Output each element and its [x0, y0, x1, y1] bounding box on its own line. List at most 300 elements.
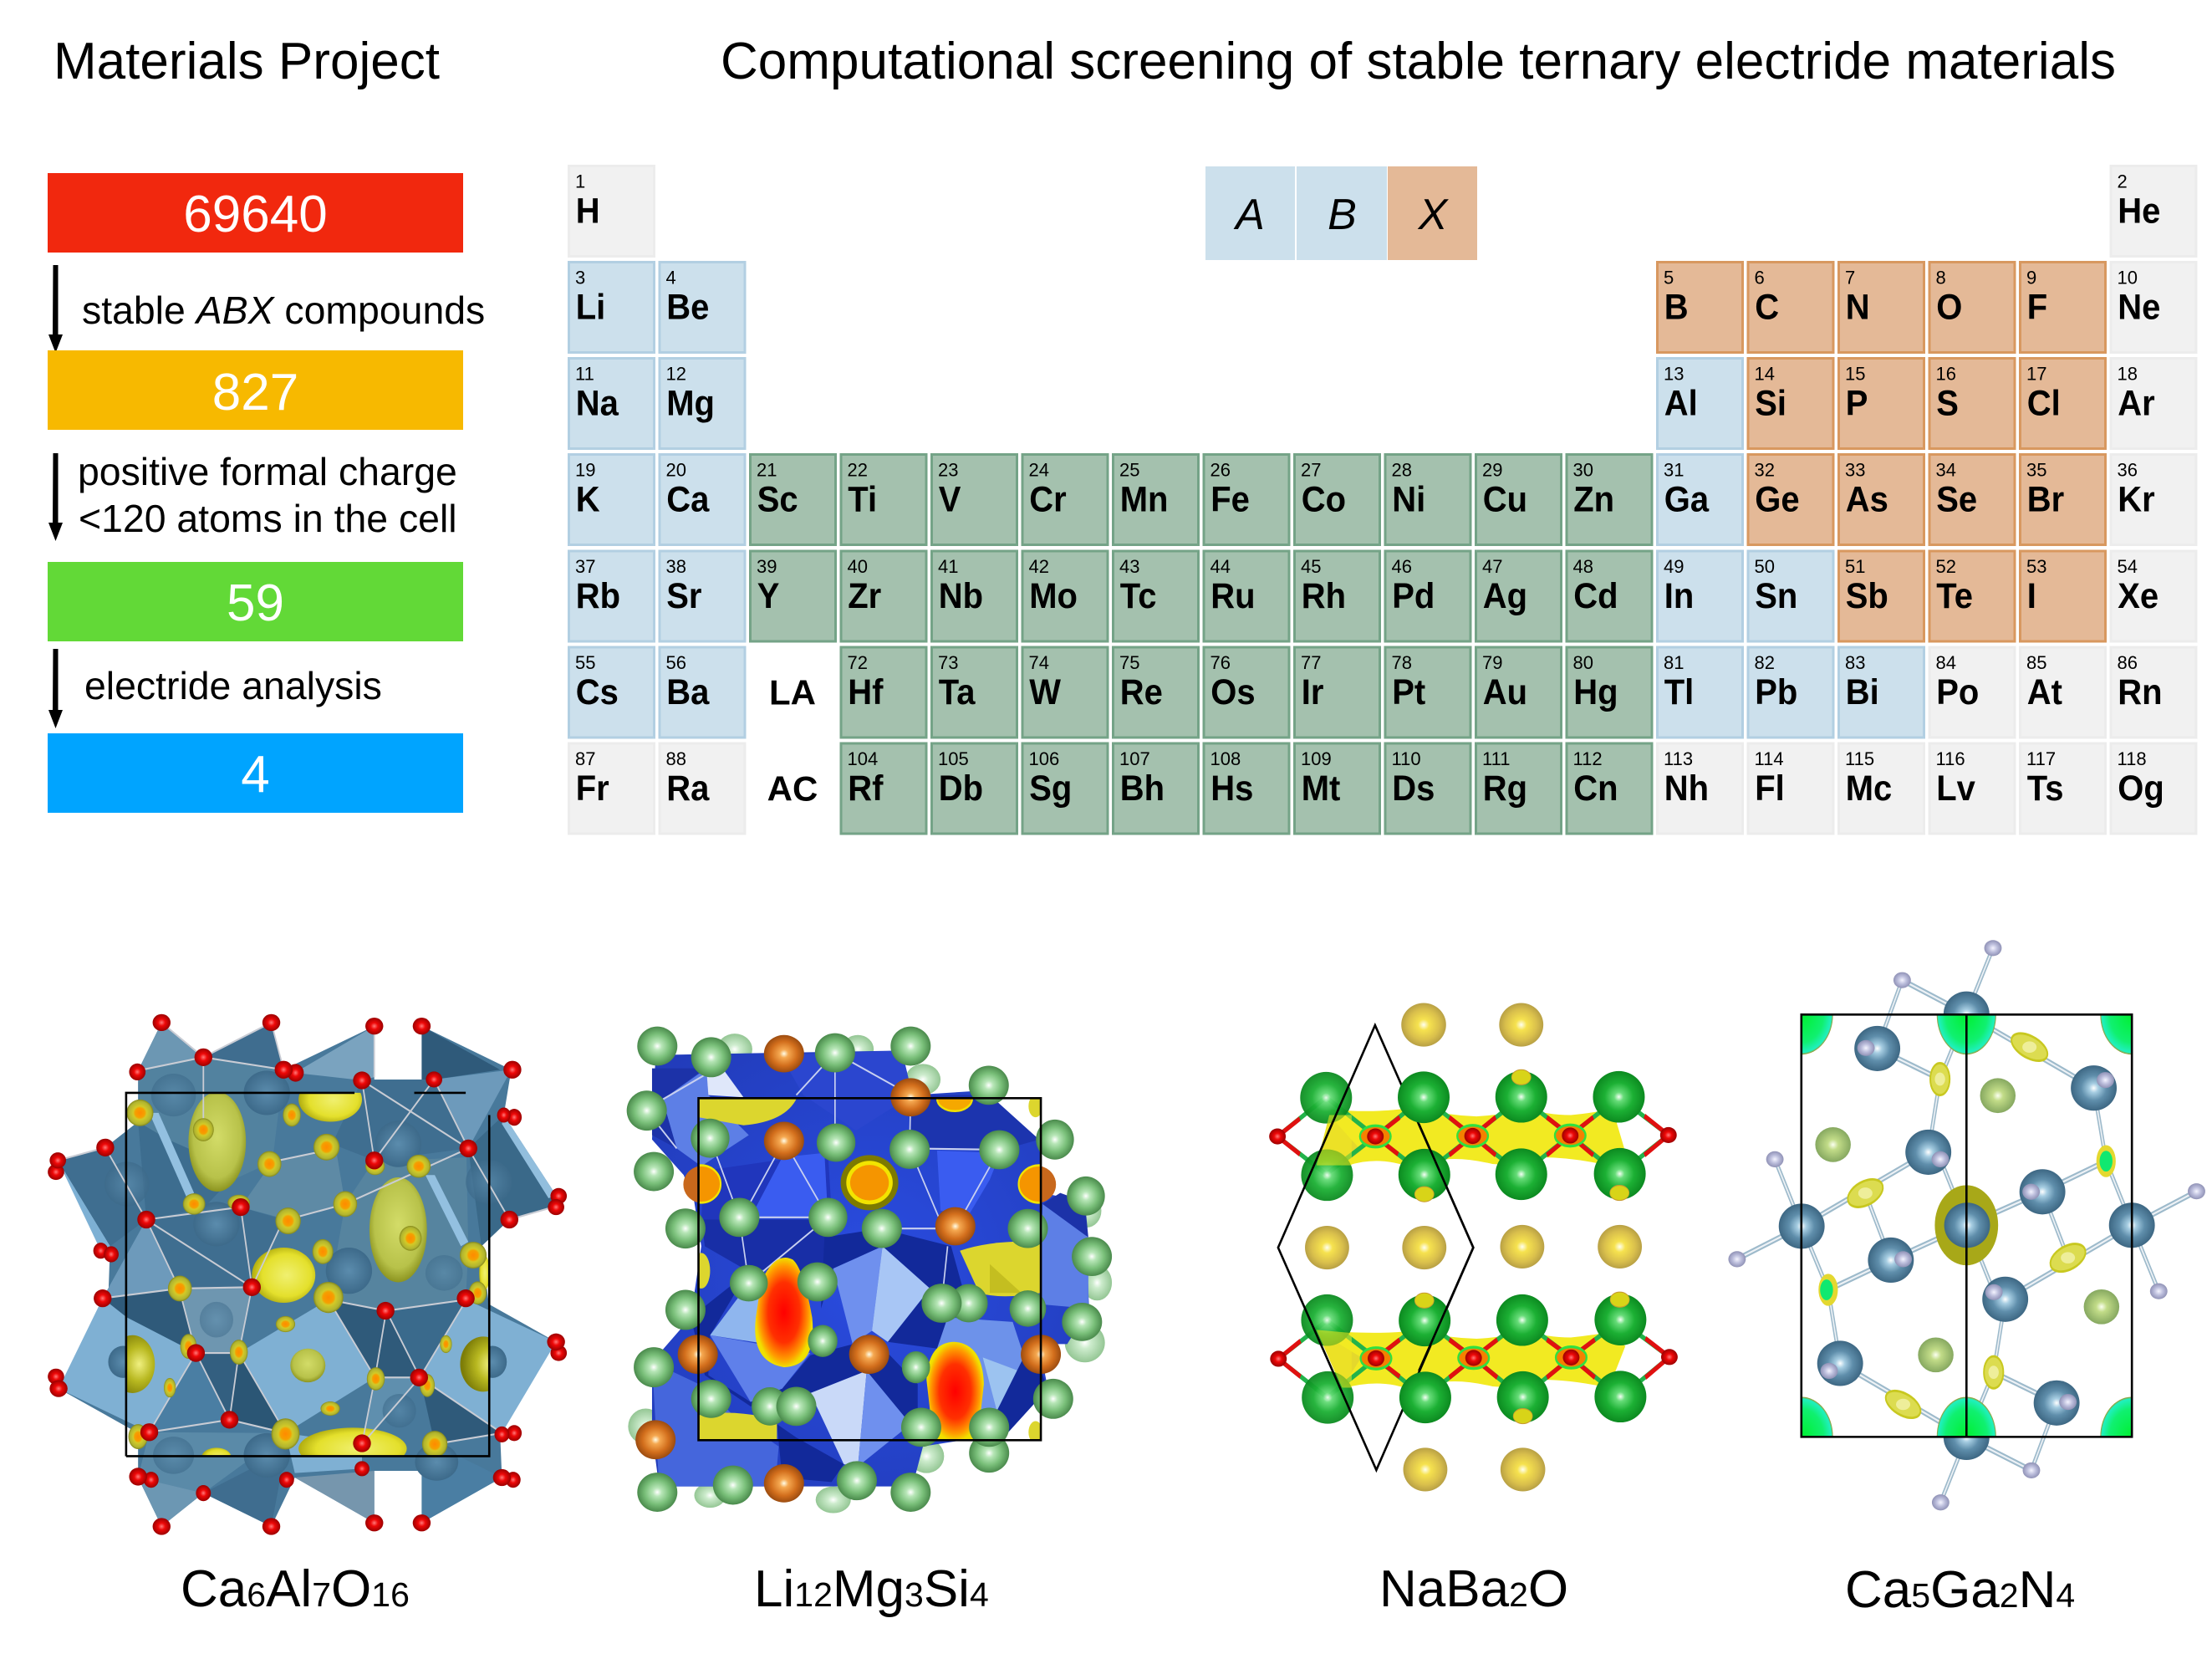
yellow clumps [1846, 1028, 2087, 1423]
cell: As: As [1846, 478, 1888, 519]
cell: Ba [660, 647, 745, 738]
cell: He: 2 [2117, 171, 2128, 192]
cell: Li [568, 263, 654, 353]
cell: O: 8 [1936, 268, 1946, 288]
cell: Zn: 30 [1573, 460, 1593, 480]
cell: Po [1929, 647, 2015, 738]
cell: Hg [1567, 647, 1652, 738]
cell: H [568, 166, 654, 256]
cell: Pb: Pb [1755, 671, 1797, 712]
cell: Xe: Xe [2118, 575, 2158, 615]
central electride [1934, 1185, 1998, 1265]
cell: Pt [1385, 647, 1470, 738]
cell: At: 85 [2026, 652, 2046, 673]
cell: Cd: 48 [1573, 556, 1593, 577]
bar: 59 [48, 562, 463, 641]
cell: I [2020, 551, 2105, 641]
cell: Fl: 114 [1754, 748, 1784, 769]
cell: Zn: Zn [1573, 478, 1614, 519]
formula: Li12Mg3Si4: Li12Mg3Si4 [754, 1560, 989, 1618]
clump highlights [1858, 1041, 2075, 1410]
cell: Br: 35 [2026, 460, 2046, 480]
cell: Mc [1839, 743, 1924, 834]
cell: Rh: Rh [1302, 575, 1346, 615]
periodic table [568, 166, 2196, 834]
cell: Po: 84 [1936, 652, 1956, 673]
cell: Rb: 37 [575, 556, 595, 577]
cell: Fe: 26 [1210, 460, 1231, 480]
cell: Li: Li [576, 286, 605, 327]
cell: Rg: 111 [1482, 748, 1510, 769]
cell: Mt [1294, 743, 1379, 834]
cell: H: H [576, 190, 600, 231]
cell: Ar: Ar [2118, 382, 2155, 423]
cell: Ru [1204, 551, 1289, 641]
back atoms [628, 1034, 1112, 1514]
gallium atoms [1779, 992, 2155, 1460]
bar: 59: 59 [227, 574, 284, 632]
bar: 69640: 69640 [183, 186, 328, 243]
cell: Cd [1567, 551, 1652, 641]
cell: Sb: 51 [1845, 556, 1865, 577]
cell: Re: 75 [1119, 652, 1139, 673]
cell: K: 19 [575, 460, 595, 480]
cell: Sb: Sb [1846, 575, 1888, 615]
cell: Bh [1114, 743, 1199, 834]
cell: In: In [1664, 575, 1694, 615]
cell: Os: 76 [1210, 652, 1231, 673]
corner electride sections [1802, 1015, 2131, 1437]
cell: Mc: Mc [1846, 768, 1892, 808]
cell: Zr: 40 [848, 556, 868, 577]
cell: Db: 105 [938, 748, 969, 769]
cell: Ti: 22 [848, 460, 868, 480]
cell: Ta: Ta [939, 671, 976, 712]
legend: A B X [1205, 166, 1477, 260]
green centred clumps [1818, 1145, 2116, 1306]
title: Computational screening: Computational screening of stable ternary electride materials [721, 33, 2116, 90]
cell: Te: Te [1936, 575, 1973, 615]
cell: Ca: Ca [666, 478, 710, 519]
cell: Ra: 88 [665, 748, 686, 769]
cell: Ca [660, 455, 745, 545]
cell: Rn: Rn [2118, 671, 2163, 712]
cell: In [1657, 551, 1742, 641]
cell: V [931, 455, 1017, 545]
cell: C: C [1755, 286, 1779, 327]
cell: Ge: Ge [1755, 478, 1800, 519]
cell: Re [1114, 647, 1199, 738]
cell: Ga: Ga [1664, 478, 1710, 519]
cell: Hg: Hg [1573, 671, 1618, 712]
cell: C [1748, 263, 1833, 353]
cell: Rf [841, 743, 926, 834]
cell: Ne: 10 [2117, 268, 2138, 288]
cell: Br [2020, 455, 2105, 545]
cell: Ge [1748, 455, 1833, 545]
crystal structure: Li12Mg3Si4 [627, 1027, 1112, 1514]
cell: Cl [2020, 358, 2105, 448]
cell: Sr: 38 [665, 556, 686, 577]
cell: P: 15 [1845, 363, 1865, 385]
cell: Cr: 24 [1028, 460, 1049, 480]
cell: Fr [568, 743, 654, 834]
cell: Ir [1294, 647, 1379, 738]
cell: Xe: 54 [2117, 556, 2138, 577]
formula: NaBa2O: NaBa2O [1379, 1560, 1568, 1618]
cell: Rf: 104 [848, 748, 878, 769]
cell: Ds: 110 [1391, 748, 1421, 769]
cell: Hs: 108 [1210, 748, 1241, 769]
cell: Au [1476, 647, 1562, 738]
cell: Cs [568, 647, 654, 738]
cell: Se: Se [1936, 478, 1977, 519]
cell: Pd: Pd [1392, 575, 1435, 615]
cell: Rg [1476, 743, 1562, 834]
bar: 827: 827 [212, 364, 298, 421]
cell: W: W [1029, 671, 1062, 712]
cell: K [568, 455, 654, 545]
cell: In: 49 [1664, 556, 1684, 577]
cell: Ga: 31 [1664, 460, 1684, 480]
cell: Kr: Kr [2118, 478, 2155, 519]
cell: Ti: Ti [848, 478, 877, 519]
cell: Bh: 107 [1119, 748, 1150, 769]
cell: Rf: Rf [848, 768, 884, 808]
cell: B: B [1664, 286, 1689, 327]
cell: Ti [841, 455, 926, 545]
cell: Bi: Bi [1846, 671, 1879, 712]
cell: Pb: 82 [1754, 652, 1775, 673]
cell: Zn [1567, 455, 1652, 545]
yellow sheet overlap left [1317, 1115, 1352, 1388]
cell: Ge: 32 [1754, 460, 1775, 480]
cell: S [1929, 358, 2015, 448]
cell: Fr: 87 [575, 748, 595, 769]
cell: S: S [1936, 382, 1959, 423]
cell: Rb: Rb [576, 575, 620, 615]
cell: Co [1294, 455, 1379, 545]
cell: Sb [1839, 551, 1924, 641]
cell: Si [1748, 358, 1833, 448]
cell: Hs: Hs [1210, 768, 1253, 808]
cell: Rn: 86 [2117, 652, 2138, 673]
cell: Sn: 50 [1754, 556, 1775, 577]
cell: Ag: 47 [1482, 556, 1502, 577]
cell: Ra: Ra [666, 768, 710, 808]
cell: Mo: Mo [1029, 575, 1078, 615]
cell: Y: Y [757, 575, 780, 615]
lithium atoms [627, 1027, 1112, 1512]
cell: Ni: Ni [1392, 478, 1425, 519]
cell: Lv: Lv [1936, 768, 1975, 808]
cell: F: 9 [2026, 268, 2036, 288]
cell: Cr: Cr [1029, 478, 1067, 519]
cell: Cs: 55 [575, 652, 595, 673]
cell: Bi [1839, 647, 1924, 738]
cell: Og [2111, 743, 2196, 834]
cell: Fe [1204, 455, 1289, 545]
cell: Rh [1294, 551, 1379, 641]
cell: Mn: Mn [1120, 478, 1169, 519]
cell: Cn [1567, 743, 1652, 834]
cell: Mt: 109 [1301, 748, 1332, 769]
cell: Mt: Mt [1302, 768, 1341, 808]
cell: Cn: 112 [1573, 748, 1603, 769]
cell: Al: 13 [1664, 363, 1684, 385]
cell: Be: Be [666, 286, 709, 327]
cell: S: 16 [1936, 363, 1956, 385]
label: AC: AC [767, 769, 818, 808]
cell: Tc: Tc [1120, 575, 1156, 615]
cell: Nb: 41 [938, 556, 958, 577]
cell: Y [751, 551, 836, 641]
cell: Fl: Fl [1755, 768, 1785, 808]
cell: Sn: Sn [1755, 575, 1797, 615]
cell: Ru: Ru [1210, 575, 1256, 615]
cell: Nb: Nb [939, 575, 983, 615]
cell: Hg: 80 [1573, 652, 1593, 673]
cell: P [1839, 358, 1924, 448]
cell: Au: 79 [1482, 652, 1502, 673]
cell: Sg [1022, 743, 1108, 834]
arrow 2 [48, 453, 63, 541]
cell: Tc: 43 [1119, 556, 1139, 577]
cell: Lv [1929, 743, 2015, 834]
cell: N: 7 [1845, 268, 1855, 288]
cell: K: K [576, 478, 600, 519]
silicon under blobs [683, 1166, 1056, 1202]
cell: Co: Co [1302, 478, 1346, 519]
cell: Ra [660, 743, 745, 834]
cell: Mn [1114, 455, 1199, 545]
cell: Co: 27 [1301, 460, 1321, 480]
cell: As [1839, 455, 1924, 545]
legend: A B X: A [1233, 191, 1265, 239]
cell: Cu: Cu [1483, 478, 1527, 519]
cell: Tl: Tl [1664, 671, 1694, 712]
cell: Na: Na [576, 382, 619, 423]
cell: Mo [1022, 551, 1108, 641]
cell: Au: Au [1483, 671, 1527, 712]
cell: Te: 52 [1936, 556, 1956, 577]
electride blobs [699, 1099, 1040, 1439]
cell: I: 53 [2026, 556, 2046, 577]
cell: Mg: 12 [665, 363, 686, 385]
cell: Ni: 28 [1391, 460, 1412, 480]
cell: Cd: Cd [1573, 575, 1618, 615]
cell: O: O [1936, 286, 1962, 327]
cell: Mc: 115 [1845, 748, 1874, 769]
cell: Al: Al [1664, 382, 1698, 423]
cell: Pt: 78 [1391, 652, 1412, 673]
formula: Ca6Al7O16: Ca6Al7O16 [181, 1560, 410, 1618]
bonds [1277, 1097, 1669, 1397]
label: atoms in the cell: <120 atoms in the cell [79, 497, 457, 540]
cell: Te [1929, 551, 2015, 641]
unit cell [1278, 1025, 1473, 1470]
cell: Fl [1748, 743, 1833, 834]
cell: Ru: 44 [1210, 556, 1231, 577]
cell: Mg: Mg [666, 382, 715, 423]
cell: Lv: 116 [1936, 748, 1965, 769]
cell: Zr: Zr [848, 575, 881, 615]
cell: Zr [841, 551, 926, 641]
cell: Ca: 20 [665, 460, 686, 480]
cell: Og: Og [2118, 768, 2164, 808]
cell: Og: 118 [2117, 748, 2147, 769]
cell: Tl [1657, 647, 1742, 738]
sodium atoms [1305, 1003, 1642, 1491]
cell: W: 74 [1028, 652, 1049, 673]
crystal structure: NaBa2O [1269, 1003, 1678, 1491]
cell: Pt: Pt [1392, 671, 1425, 712]
cell: Rn [2111, 647, 2196, 738]
cell: Ga [1657, 455, 1742, 545]
cell: Ds [1385, 743, 1470, 834]
bar: 827 [48, 350, 463, 430]
legend: A B X: B [1328, 191, 1357, 239]
polyhedron edges [58, 1023, 556, 1444]
cell: Cu: 29 [1482, 460, 1502, 480]
yellow electride sheets [1317, 1107, 1625, 1389]
cell: Cs: Cs [576, 671, 619, 712]
cell: Fr: Fr [576, 768, 609, 808]
unit cell [126, 1093, 489, 1456]
calcium atoms [1815, 1078, 2119, 1372]
cell: Os [1204, 647, 1289, 738]
cell: Ta: 73 [938, 652, 958, 673]
cell: Sc: Sc [757, 478, 798, 519]
cell: O [1929, 263, 2015, 353]
cell: Hf: 72 [848, 652, 868, 673]
cell: Nh [1657, 743, 1742, 834]
cell: At [2020, 647, 2105, 738]
cell: Nb [931, 551, 1017, 641]
cell: Pd [1385, 551, 1470, 641]
cell: Pd: 46 [1391, 556, 1412, 577]
cell: Ts: Ts [2027, 768, 2063, 808]
funnel panel [48, 173, 485, 813]
cell: Nh: 113 [1664, 748, 1693, 769]
cell: N: N [1846, 286, 1870, 327]
cell: Sg: 106 [1028, 748, 1059, 769]
cell: V: 23 [938, 460, 958, 480]
cell: Al [1657, 358, 1742, 448]
bonds [1737, 948, 2196, 1503]
nitrogen atoms [1728, 940, 2205, 1510]
cell: Ag [1476, 551, 1562, 641]
label: positive formal charge: positive formal charge [78, 450, 457, 493]
arrow 1 [48, 265, 63, 353]
cell: Be [660, 263, 745, 353]
bar: 4 [48, 733, 463, 813]
cell: Ag: Ag [1483, 575, 1527, 615]
cell: Fe: Fe [1210, 478, 1250, 519]
cell: Cl: 17 [2026, 363, 2046, 385]
cell: Se [1929, 455, 2015, 545]
cell: Li: 3 [575, 268, 585, 288]
cell: Bi: 83 [1845, 652, 1865, 673]
cell: Sg: Sg [1029, 768, 1072, 808]
cell: Rh: 45 [1301, 556, 1321, 577]
cell: I: I [2027, 575, 2036, 615]
cell: Cn: Cn [1573, 768, 1618, 808]
cell: Ne: Ne [2118, 286, 2160, 327]
cell: Ne [2111, 263, 2196, 353]
cell: Ta [931, 647, 1017, 738]
cell: Ir: Ir [1302, 671, 1323, 712]
polyhedra body [58, 1023, 556, 1527]
cell: As: 33 [1845, 460, 1865, 480]
cell: Ts: 117 [2026, 748, 2056, 769]
cell: N [1839, 263, 1924, 353]
cell: Hf [841, 647, 926, 738]
cell: C: 6 [1754, 268, 1765, 288]
cell: Na: 11 [575, 363, 594, 385]
cell: Se: 34 [1936, 460, 1956, 480]
cell: Mn: 25 [1119, 460, 1139, 480]
cell: Kr: 36 [2117, 460, 2138, 480]
cell: Si: Si [1755, 382, 1786, 423]
cell: Ts [2020, 743, 2105, 834]
cell: Ds: Ds [1392, 768, 1435, 808]
cell: Os: Os [1210, 671, 1256, 712]
yellow caps [1414, 1069, 1629, 1424]
cell: At: At [2027, 671, 2062, 712]
label: LA: LA [769, 672, 816, 712]
unit cell [1802, 1014, 2132, 1437]
cell: Rg: Rg [1483, 768, 1527, 808]
cell: Ir: 77 [1301, 652, 1321, 673]
cell: Bh: Bh [1120, 768, 1165, 808]
cell: Tl: 81 [1664, 652, 1684, 673]
unit cell [699, 1098, 1041, 1440]
oxygen atoms [1269, 1127, 1678, 1367]
cell: Ba: 56 [665, 652, 686, 673]
cell: B [1657, 263, 1742, 353]
cell: Ar: 18 [2117, 363, 2138, 385]
cell: Sr: Sr [666, 575, 702, 615]
cell: Sc: 21 [757, 460, 777, 480]
cell: Ni [1385, 455, 1470, 545]
cell: B: 5 [1664, 268, 1674, 288]
electride blobs [127, 1092, 488, 1455]
ring contours [1360, 1125, 1587, 1369]
cell: Si: 14 [1754, 363, 1775, 385]
cell: Nh: Nh [1664, 768, 1709, 808]
cell: Hf: Hf [848, 671, 884, 712]
formula: Ca5Ga2N4: Ca5Ga2N4 [1845, 1561, 2075, 1619]
cell: P: P [1846, 382, 1868, 423]
title: Materials Project: Materials Project [54, 33, 440, 90]
cell: Ba: Ba [666, 671, 710, 712]
yellow orange sites [126, 1100, 487, 1457]
barium atoms left column [1300, 1072, 1353, 1424]
cell: F [2020, 263, 2105, 353]
crystal structure: Ca6Al7O16 [48, 1014, 567, 1535]
cell: Kr [2111, 455, 2196, 545]
cell: Xe [2111, 551, 2196, 641]
cell: V: V [939, 478, 961, 519]
polyhedra body [652, 1050, 1089, 1487]
cell: Y: 39 [757, 556, 777, 577]
cell: Na [568, 358, 654, 448]
arrow 3 [48, 649, 63, 728]
cell: Be: 4 [665, 268, 676, 288]
bar: 4: 4 [241, 746, 270, 804]
cell: Re: Re [1120, 671, 1163, 712]
